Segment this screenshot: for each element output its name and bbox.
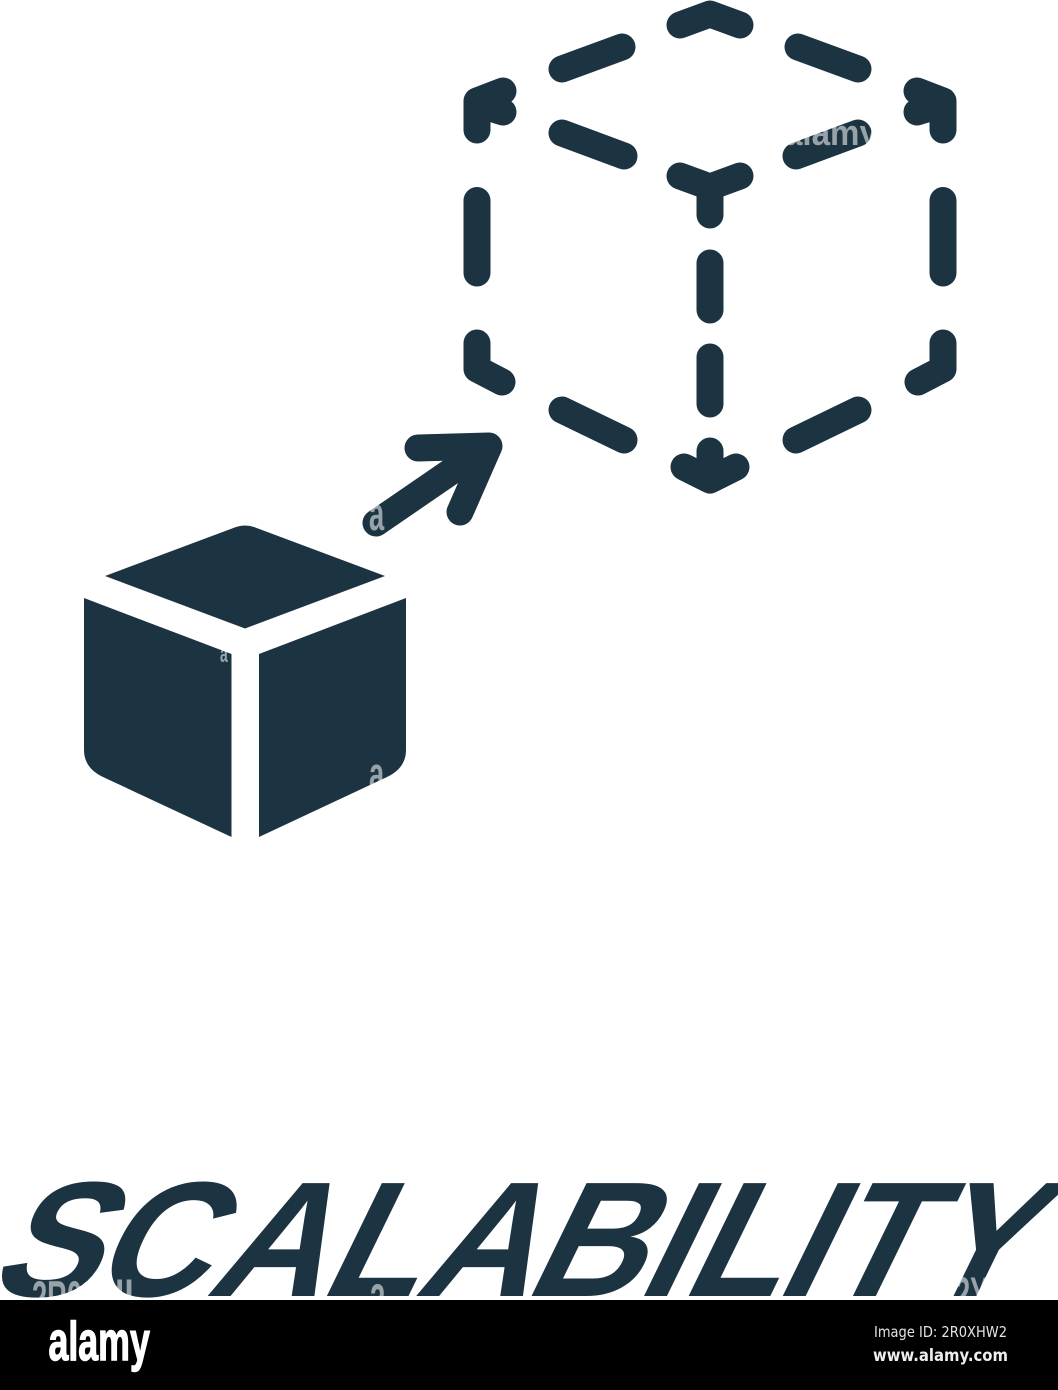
icon: dashed outline cube xyxy=(477,14,943,480)
watermark fragments: a xyxy=(369,488,385,541)
icon: solid cube xyxy=(84,526,406,837)
icon: arrow xyxy=(376,446,489,523)
watermark fragments xyxy=(32,114,988,1328)
website: www.alamy.com xyxy=(873,1346,1008,1366)
watermark fragments: alamy xyxy=(784,114,879,153)
watermark fragments: a xyxy=(369,748,385,801)
footer bar xyxy=(0,1300,1058,1390)
footer text xyxy=(48,1310,1008,1372)
watermark logo: alamy xyxy=(48,1310,150,1372)
watermark fragments: a xyxy=(220,641,229,668)
image id: Image ID: 2R0XHW2 xyxy=(874,1323,1007,1341)
